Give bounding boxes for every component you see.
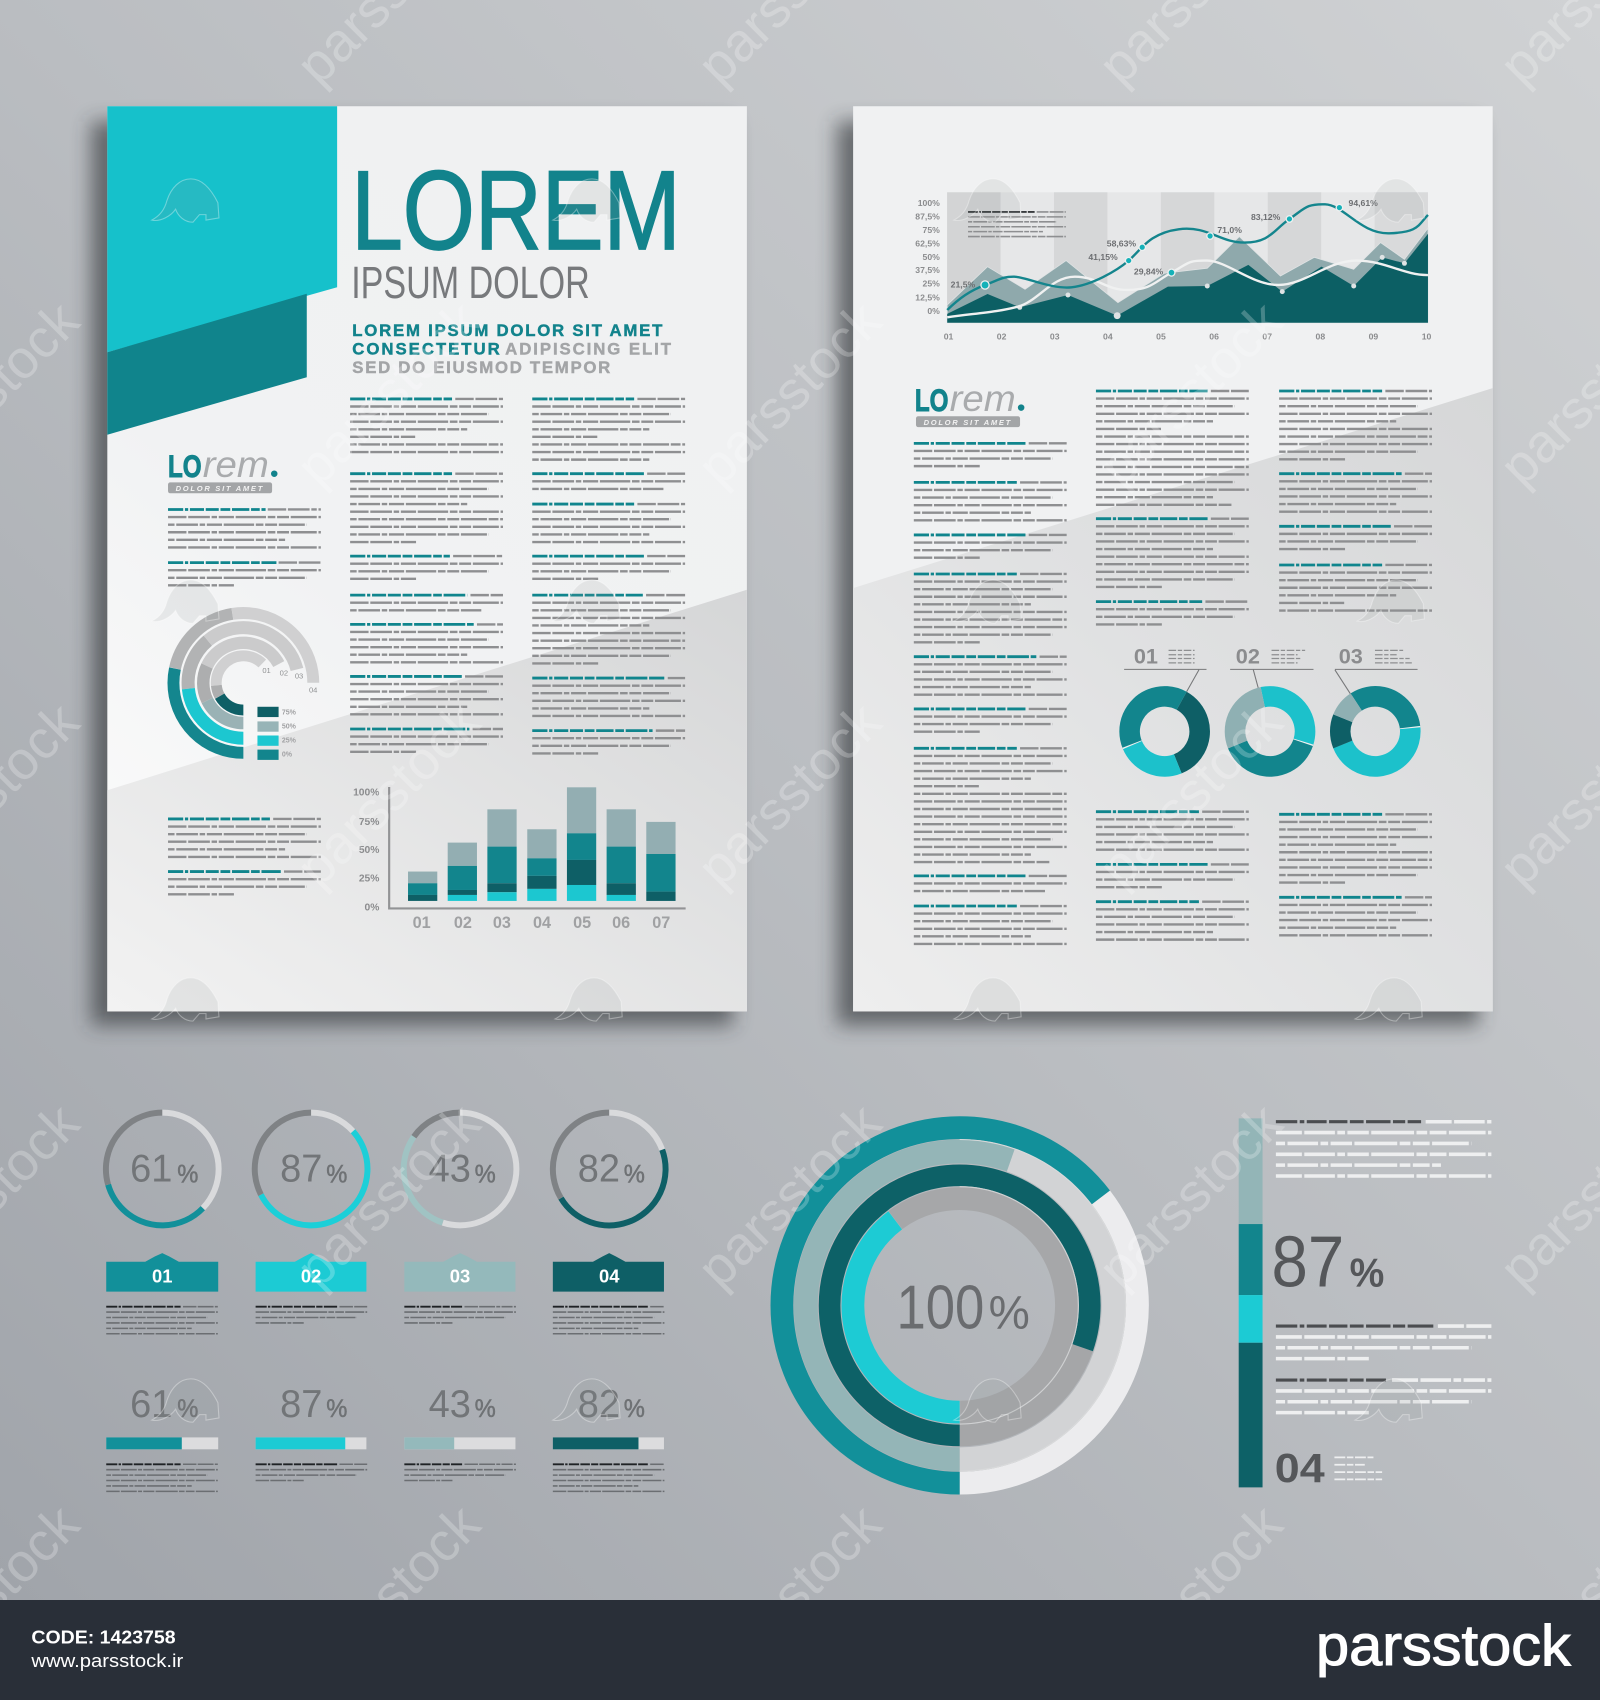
text block (914, 906, 1067, 944)
y axis labels: 0% (927, 306, 940, 316)
axis (389, 787, 686, 908)
y axis labels: 50% (359, 845, 379, 856)
intro heading: CONSECTETUR (352, 339, 500, 358)
progress ring 61%: 61 (130, 1148, 172, 1191)
intro heading: LOREM IPSUM DOLOR SIT AMET (352, 321, 663, 340)
intro heading: SED DO EIUSMOD TEMPOR (352, 358, 610, 377)
value: 04 (1275, 1445, 1382, 1491)
donut chart 03 (1327, 643, 1424, 780)
logo: Lorem: rem (203, 444, 269, 485)
logo: Lorem: LO (915, 383, 949, 418)
teal trend line (947, 204, 1428, 310)
radial chart labels and legend: 02 (280, 668, 288, 677)
x axis labels: 07 (652, 914, 670, 932)
big concentric ring chart: % (989, 1286, 1030, 1339)
tab 03 (404, 1253, 515, 1292)
text block (553, 1464, 664, 1491)
watermark elephants (152, 179, 1424, 1422)
text column: middle (350, 399, 503, 752)
footer bar (0, 1600, 1600, 1700)
watermark text: parsstock (686, 691, 893, 898)
watermark text: parsstock (686, 290, 893, 497)
y axis labels: 87,5% (915, 212, 940, 222)
page shadow (91, 121, 733, 1025)
percent bar 43%: 43 (429, 1383, 471, 1426)
text block (914, 443, 1067, 466)
text block (914, 535, 1067, 558)
text block (914, 574, 1067, 642)
text block (256, 1464, 367, 1481)
data value labels (951, 198, 1378, 289)
text block (106, 1307, 218, 1334)
text block (532, 678, 685, 716)
text block (1096, 864, 1249, 887)
logo: Lorem: LO (168, 449, 202, 484)
text block (1096, 812, 1249, 850)
percent bar 61% (106, 1383, 218, 1449)
text block (1276, 1380, 1491, 1413)
page lower diagonal tone (107, 590, 747, 1011)
text block (1279, 474, 1432, 512)
text block (553, 1307, 664, 1334)
watermark text: parsstock (686, 1092, 893, 1299)
text block (168, 872, 321, 894)
stacked bar chart (353, 787, 686, 932)
percent bar 61%: 61 (130, 1383, 172, 1426)
progress ring 61% (83, 1089, 242, 1249)
tab 03: 03 (450, 1265, 470, 1286)
progress ring 43% (382, 1090, 539, 1248)
white peak nodes (1017, 255, 1407, 319)
y axis labels: 50% (923, 252, 940, 262)
donut chart 02: 02 (1236, 643, 1260, 668)
radial chart labels and legend: 01 (262, 666, 271, 675)
website: www.parsstock.ir (30, 1650, 183, 1671)
y axis labels (915, 198, 940, 316)
text block (404, 1464, 516, 1481)
tab 04: 04 (599, 1265, 620, 1286)
text block (168, 819, 321, 857)
text column: sidebar lower (168, 819, 321, 894)
text column: third (1279, 391, 1432, 935)
logo: Lorem (168, 444, 278, 493)
value: 87%: % (1350, 1250, 1384, 1296)
percent bar 82%: % (624, 1395, 645, 1423)
text block (532, 556, 685, 579)
cover block: dark teal (107, 294, 307, 435)
progress ring 82%: % (624, 1161, 645, 1189)
value: 04: 04 (1275, 1445, 1325, 1491)
cover block: cyan (107, 106, 337, 352)
radial chart labels and legend (257, 666, 317, 760)
x axis labels: 04 (533, 914, 551, 932)
intro heading (352, 321, 672, 377)
value: 87%: 87 (1272, 1222, 1344, 1303)
x axis labels: 08 (1316, 331, 1325, 341)
text block (350, 676, 503, 714)
text block (168, 509, 321, 547)
x axis labels: 01 (944, 331, 954, 341)
x axis labels (944, 331, 1432, 341)
radial chart labels and legend: 75% (282, 709, 297, 716)
data nodes (981, 204, 1343, 289)
watermark text: parsstock (1087, 691, 1294, 898)
x axis labels: 03 (493, 914, 511, 932)
text column: sidebar upper (168, 509, 321, 585)
text column: right (532, 399, 685, 753)
data value labels: 58,63% (1107, 239, 1136, 249)
x axis labels: 06 (1209, 331, 1219, 341)
text block (1279, 526, 1432, 549)
text block (1276, 1326, 1491, 1359)
tab 02 (256, 1253, 366, 1292)
y axis labels: 100% (918, 198, 940, 208)
data value labels: 21,5% (951, 279, 976, 289)
text block (350, 595, 503, 610)
y axis labels: 25% (359, 873, 379, 884)
radial chart labels and legend: 0% (282, 752, 293, 759)
panel: percent rings and tabs (83, 1089, 687, 1334)
percent bar 43% (404, 1383, 515, 1449)
donut chart 01: 01 (1134, 643, 1158, 668)
text block (914, 876, 1067, 891)
text block (1279, 897, 1432, 935)
text block (532, 399, 685, 460)
y axis labels: 0% (365, 903, 379, 914)
data value labels: 83,12% (1251, 212, 1281, 222)
title: LOREM (351, 147, 681, 273)
watermark text: parsstock (285, 1092, 492, 1299)
image code: CODE: 1423758 (31, 1626, 176, 1647)
percent bar 43%: % (475, 1395, 496, 1423)
page shadow (837, 121, 1479, 1025)
y axis labels (353, 788, 379, 914)
donut chart 01 (1117, 643, 1212, 779)
logo: Lorem: rem (950, 378, 1016, 419)
progress ring 43%: % (475, 1161, 496, 1189)
chart stripes (947, 192, 1428, 323)
text block (532, 595, 685, 663)
subtitle: IPSUM DOLOR (351, 257, 590, 308)
text block (1279, 565, 1432, 611)
progress ring 43%: 43 (429, 1148, 471, 1191)
data value labels: 29,84% (1134, 266, 1164, 276)
percent bar 87% (256, 1383, 366, 1449)
watermark text: parsstock (285, 1493, 492, 1700)
progress ring 61%: % (177, 1161, 198, 1189)
watermark text: parsstock (1087, 1092, 1294, 1299)
text block (106, 1464, 218, 1491)
progress ring 87%: 87 (280, 1148, 322, 1191)
y axis labels: 25% (923, 279, 940, 289)
y axis labels: 75% (923, 225, 940, 235)
x axis labels: 10 (1422, 331, 1432, 341)
text block (914, 482, 1067, 520)
text block (532, 474, 685, 489)
radial bar chart (160, 600, 326, 766)
donut chart 03: 03 (1339, 643, 1363, 668)
percent bar 87%: % (326, 1395, 347, 1423)
percent bar 82%: 82 (578, 1383, 620, 1426)
percent bar 61%: % (177, 1395, 198, 1423)
radial chart labels and legend: 50% (282, 723, 297, 730)
page lower diagonal tone (853, 388, 1493, 1011)
x axis labels: 02 (454, 914, 472, 932)
light teal area (947, 228, 1428, 323)
text block (914, 657, 1067, 695)
progress ring 82%: 82 (578, 1148, 620, 1191)
radial chart labels and legend: 03 (295, 672, 303, 681)
text block (256, 1307, 367, 1323)
text column: first (914, 443, 1067, 944)
vertical stacked bar (1239, 1118, 1263, 1487)
text block (1276, 1122, 1491, 1176)
x axis labels: 07 (1262, 331, 1272, 341)
x axis labels: 03 (1050, 331, 1060, 341)
intro heading: ADIPISCING ELIT (505, 339, 672, 358)
panel: percent bars (106, 1383, 664, 1491)
x axis labels (413, 914, 670, 932)
x axis labels: 02 (997, 331, 1007, 341)
x axis labels: 05 (1156, 331, 1166, 341)
logo: Lorem: DOLOR SIT AMET (924, 418, 1012, 427)
radial chart labels and legend: 25% (282, 738, 297, 745)
bars (408, 787, 676, 901)
watermark text: parsstock (1087, 1493, 1294, 1700)
page surface (107, 106, 747, 1011)
watermark text: parsstock (1087, 290, 1294, 497)
page surface (853, 106, 1493, 1011)
area and line chart (915, 192, 1432, 341)
x axis labels: 01 (413, 914, 431, 932)
progress ring 87%: % (326, 1161, 347, 1189)
data value labels: 41,15% (1088, 252, 1118, 262)
text block (914, 748, 1067, 862)
logo: Lorem (915, 378, 1024, 427)
text block (1279, 391, 1432, 459)
text block (1096, 602, 1249, 624)
progress ring 82% (532, 1092, 687, 1246)
brand logo: parsstock (1316, 1614, 1571, 1678)
x axis labels: 05 (573, 914, 591, 932)
progress ring 87% (232, 1089, 391, 1249)
text block (168, 563, 321, 585)
text block (350, 399, 503, 452)
text column: second (1096, 391, 1249, 940)
center value: 100 (896, 1273, 984, 1342)
y axis labels: 37,5% (915, 265, 940, 275)
x axis labels: 09 (1369, 331, 1378, 341)
watermark text: parsstock (285, 290, 492, 497)
y axis labels: 75% (359, 817, 379, 828)
y axis labels: 12,5% (915, 292, 940, 302)
x axis labels: 06 (612, 914, 630, 932)
tab 01 (106, 1253, 218, 1292)
data value labels: 94,61% (1349, 198, 1378, 208)
y axis labels: 62,5% (915, 239, 940, 249)
radial chart labels and legend: 04 (309, 686, 317, 695)
panel: right page (837, 106, 1493, 1025)
text block (532, 504, 685, 542)
text block (914, 709, 1067, 732)
white trend line (947, 261, 1428, 317)
dark teal area (947, 234, 1428, 323)
text block (532, 731, 685, 753)
text block (1279, 814, 1432, 883)
percent bar 82% (553, 1383, 664, 1449)
data value labels: 71,0% (1217, 225, 1242, 235)
watermark text: parsstock (686, 1493, 893, 1700)
text block (350, 624, 503, 662)
text block (350, 474, 503, 542)
percent bar 87%: 87 (280, 1383, 322, 1426)
text block (1096, 902, 1249, 940)
text block (404, 1307, 516, 1323)
tab 01: 01 (152, 1265, 173, 1286)
panel: left page (91, 106, 747, 1025)
big concentric ring chart (710, 1056, 1209, 1555)
logo: Lorem: DOLOR SIT AMET (176, 484, 264, 493)
tab 02: 02 (301, 1265, 321, 1286)
tab 04 (553, 1253, 664, 1292)
x axis labels: 04 (1103, 331, 1113, 341)
text block (350, 556, 503, 579)
text block (1096, 391, 1249, 505)
text block (350, 729, 503, 752)
text block (1096, 519, 1249, 587)
donut chart 02 (1224, 643, 1316, 777)
chart note text (968, 212, 1066, 237)
watermark text: parsstock (285, 691, 492, 898)
y axis labels: 100% (353, 788, 379, 799)
